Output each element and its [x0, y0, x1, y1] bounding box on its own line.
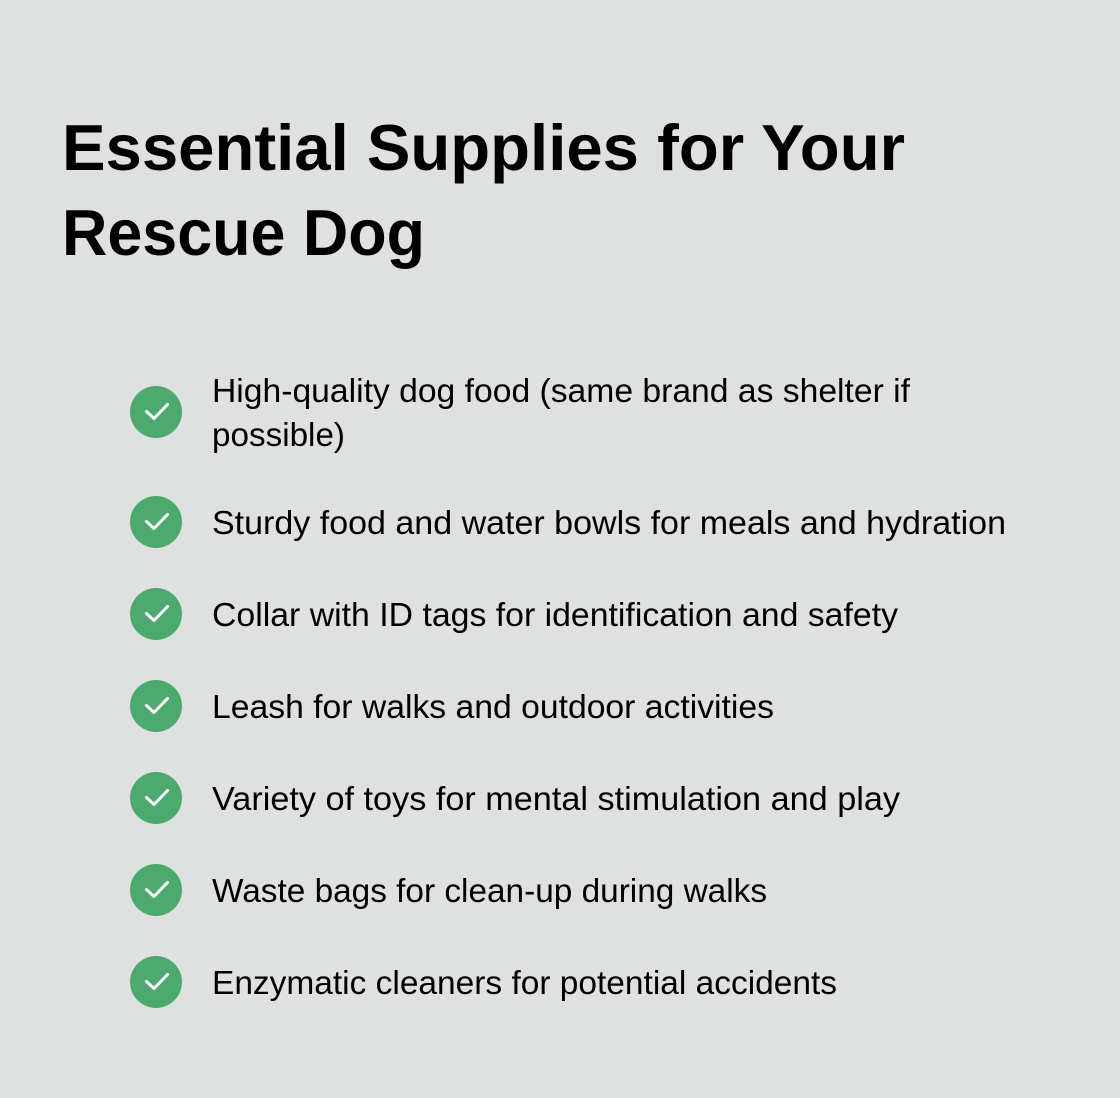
title: Essential Supplies for Your [62, 111, 905, 184]
item: dog food: High-quality dog food (same brand as shelter if [212, 372, 911, 409]
checklist [130, 372, 1006, 1008]
item: bowls: Sturdy food and water bowls for meals and hydration [212, 504, 1006, 541]
item: cleaners [130, 956, 837, 1008]
item: waste bags: Waste bags for clean-up during walks [212, 872, 767, 909]
item: collar: Collar with ID tags for identification and safety [212, 596, 899, 633]
item: bowls [130, 496, 1006, 548]
title [62, 111, 905, 269]
item: collar [130, 588, 899, 640]
item: cleaners: Enzymatic cleaners for potential accidents [212, 964, 837, 1001]
item: waste bags [130, 864, 767, 916]
item: toys: Variety of toys for mental stimulation and play [212, 780, 901, 817]
item: dog food: possible) [212, 416, 345, 453]
title: Rescue Dog [62, 196, 425, 269]
item: dog food [130, 372, 911, 453]
item: leash [130, 680, 774, 732]
item: toys [130, 772, 901, 824]
item: leash: Leash for walks and outdoor activities [212, 688, 774, 725]
